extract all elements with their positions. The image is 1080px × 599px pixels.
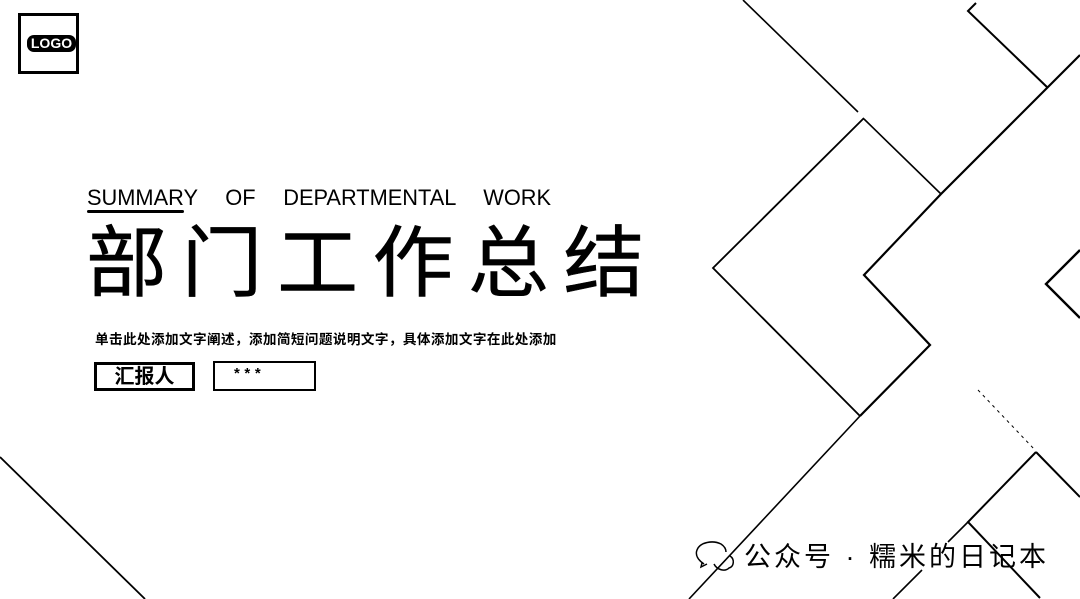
subtitle underline — [87, 210, 184, 213]
description text: 单击此处添加文字阐述，添加简短问题说明文字，具体添加文字在此处添加 — [95, 332, 557, 347]
subtitle: SUMMARY OF DEPARTMENTAL WORK — [87, 185, 551, 210]
reporter label: 汇报人 — [114, 366, 174, 388]
reporter label — [94, 362, 195, 391]
bottom left diagonal — [0, 457, 145, 599]
main title: 部门工作总结 — [86, 219, 659, 307]
logo text: LOGO — [31, 35, 72, 51]
right edge chevron — [1046, 250, 1080, 318]
icon: chat bubbles — [696, 541, 734, 571]
lower right lines — [893, 390, 1080, 599]
watermark text: 公众号 · 糯米的日记本 — [744, 542, 1049, 572]
watermark — [696, 541, 1049, 572]
large left chevron — [689, 118, 864, 599]
reporter value: *** — [234, 365, 265, 382]
top diagonal lines — [743, 0, 941, 194]
reporter value box — [213, 361, 316, 391]
top right corner shape — [860, 3, 1080, 416]
logo box — [18, 13, 79, 74]
